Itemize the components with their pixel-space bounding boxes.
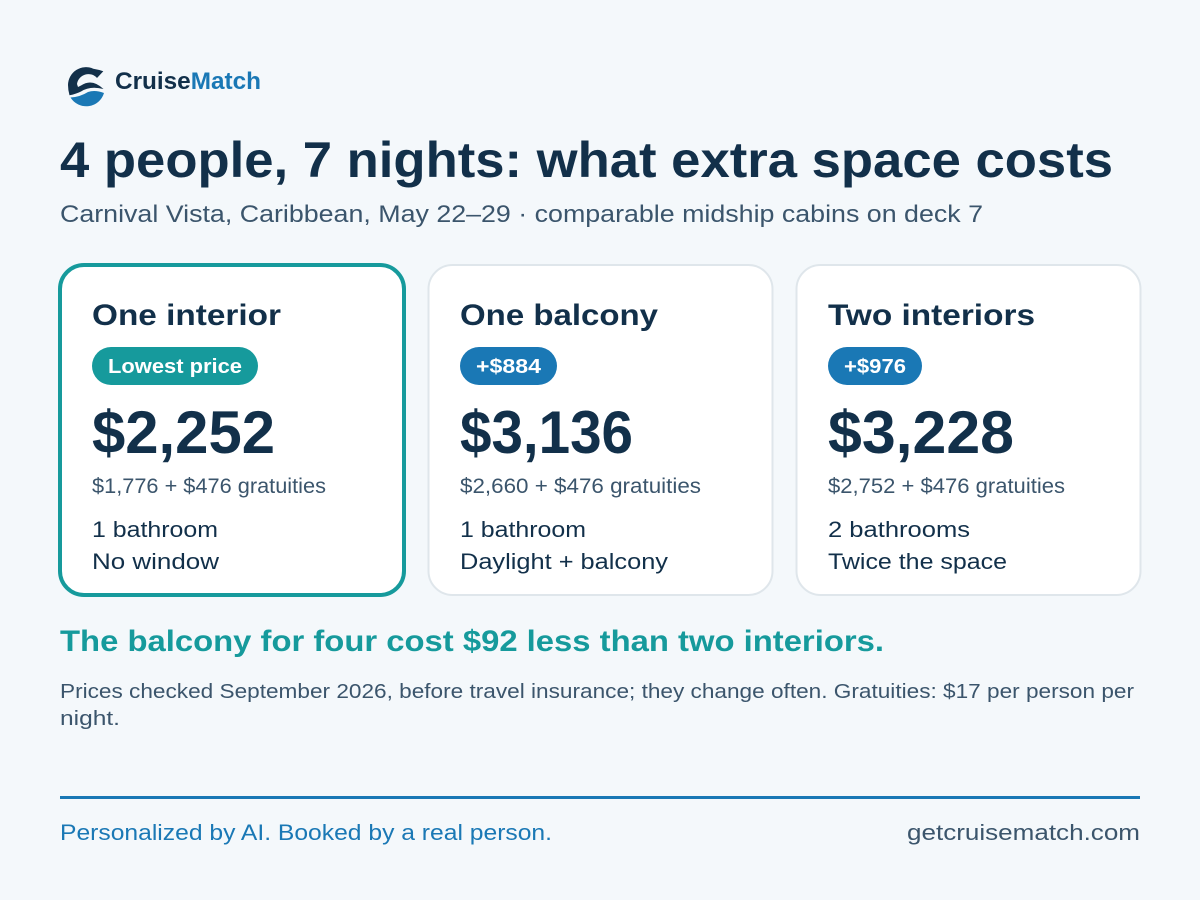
price breakdown: $2,660 + $476 gratuities — [460, 475, 701, 498]
panel: one interior — [60, 265, 404, 595]
price breakdown: $2,752 + $476 gratuities — [828, 475, 1065, 498]
subtitle: Carnival Vista, Caribbean, May 22–29 · comparable midship cabins on deck 7 — [60, 201, 983, 228]
callout: The balcony for four cost $92 less than two interiors. — [60, 625, 884, 658]
badge: price difference — [828, 347, 922, 385]
icon: wave C mark — [68, 67, 104, 106]
card heading: Two interiors — [828, 299, 1035, 332]
card heading: One interior — [92, 299, 281, 332]
feature: space: Twice the space — [828, 549, 1007, 574]
footnote: night. — [60, 708, 120, 730]
panel: one balcony — [428, 265, 772, 595]
title: 4 people, 7 nights: what extra space costs — [60, 132, 1113, 188]
wordmark: CruiseMatch — [115, 68, 261, 95]
price: $3,136 — [460, 399, 633, 466]
footnote — [60, 681, 1134, 730]
logo — [68, 67, 261, 106]
price: $2,252 — [92, 399, 275, 466]
badge: price difference: +$884 — [476, 356, 542, 378]
price breakdown: $1,776 + $476 gratuities — [92, 475, 326, 498]
panel: two interiors — [796, 265, 1140, 595]
badge: price difference: +$976 — [844, 356, 906, 378]
price: $3,228 — [828, 399, 1014, 466]
footer url: getcruisematch.com — [907, 820, 1140, 845]
card heading: One balcony — [460, 299, 658, 332]
badge: lowest price — [92, 347, 258, 385]
badge: price difference — [460, 347, 557, 385]
footnote: Prices checked September 2026, before travel insurance; they change often. Gratuities: $17 per person per — [60, 681, 1134, 703]
feature: bathrooms: 1 bathroom — [460, 517, 586, 542]
feature: window: No window — [92, 549, 219, 574]
feature: bathrooms: 2 bathrooms — [828, 517, 970, 542]
feature: daylight: Daylight + balcony — [460, 549, 668, 574]
footer tagline: Personalized by AI. Booked by a real person. — [60, 820, 552, 845]
badge: lowest price: Lowest price — [108, 356, 242, 378]
feature: bathrooms: 1 bathroom — [92, 517, 218, 542]
